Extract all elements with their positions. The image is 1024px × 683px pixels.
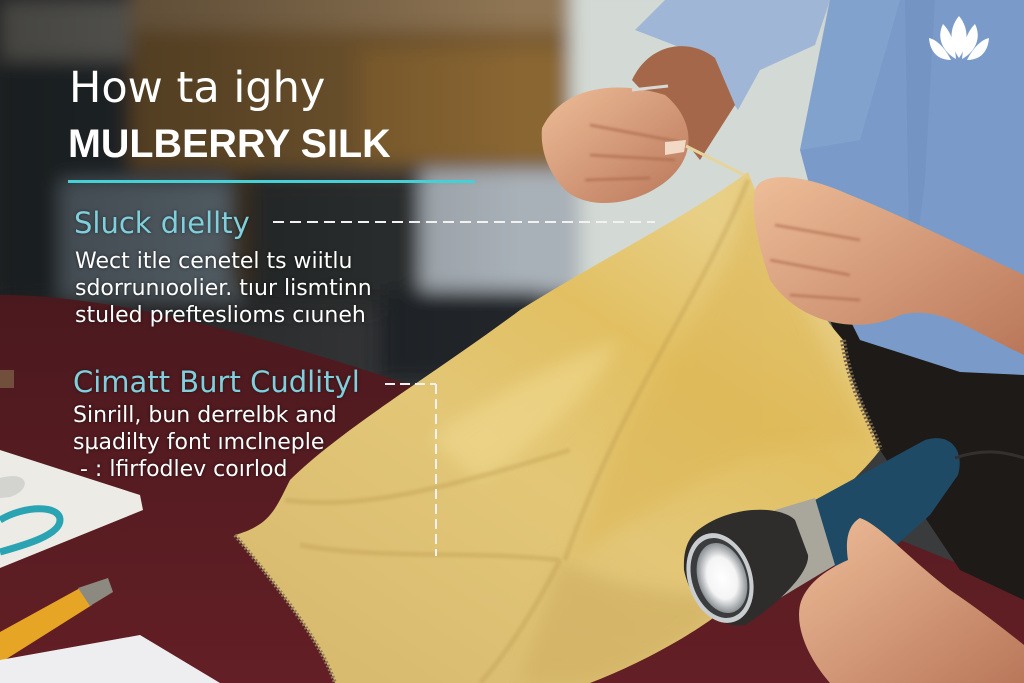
icon: lotus logo: [929, 16, 989, 60]
title underline: [68, 180, 475, 183]
trousers: [830, 320, 1024, 600]
title line 2: MULBERRY SILK: [68, 122, 391, 166]
table: [0, 295, 1024, 683]
silk cloth: [235, 172, 880, 683]
text block: section 1: stuled prefteslioms cıuneh: [75, 303, 366, 328]
title line 1: How ta ighy: [69, 63, 325, 113]
text block: section 2: Sinrill, bun derrelbk and: [73, 403, 337, 428]
right hand pinching cloth: [754, 177, 1024, 355]
torch: [675, 438, 1024, 632]
text block: section 1: [75, 249, 372, 328]
shirt: [635, 0, 1024, 375]
arm and upper hand: [542, 46, 746, 203]
text block: section 2: [73, 403, 337, 482]
text block: section 1: Wect itle cenetel ts wiitlu: [75, 249, 352, 274]
dashed leader 1: [273, 221, 655, 223]
table items: [0, 370, 220, 683]
text block: section 2: sµadilty font ımclneple: [73, 430, 324, 455]
heading: section 2: Cimatt Burt Cudlityl: [73, 365, 360, 399]
heading: section 1: Sluck dıellty: [74, 206, 250, 240]
text block: section 1: sdorrunıoolier. tıur lismtinn: [75, 276, 372, 301]
lower hand: [799, 518, 1024, 683]
text block: section 2: - : lfirfodlev coırlod: [80, 457, 287, 482]
dashed leader 2: [385, 384, 436, 556]
